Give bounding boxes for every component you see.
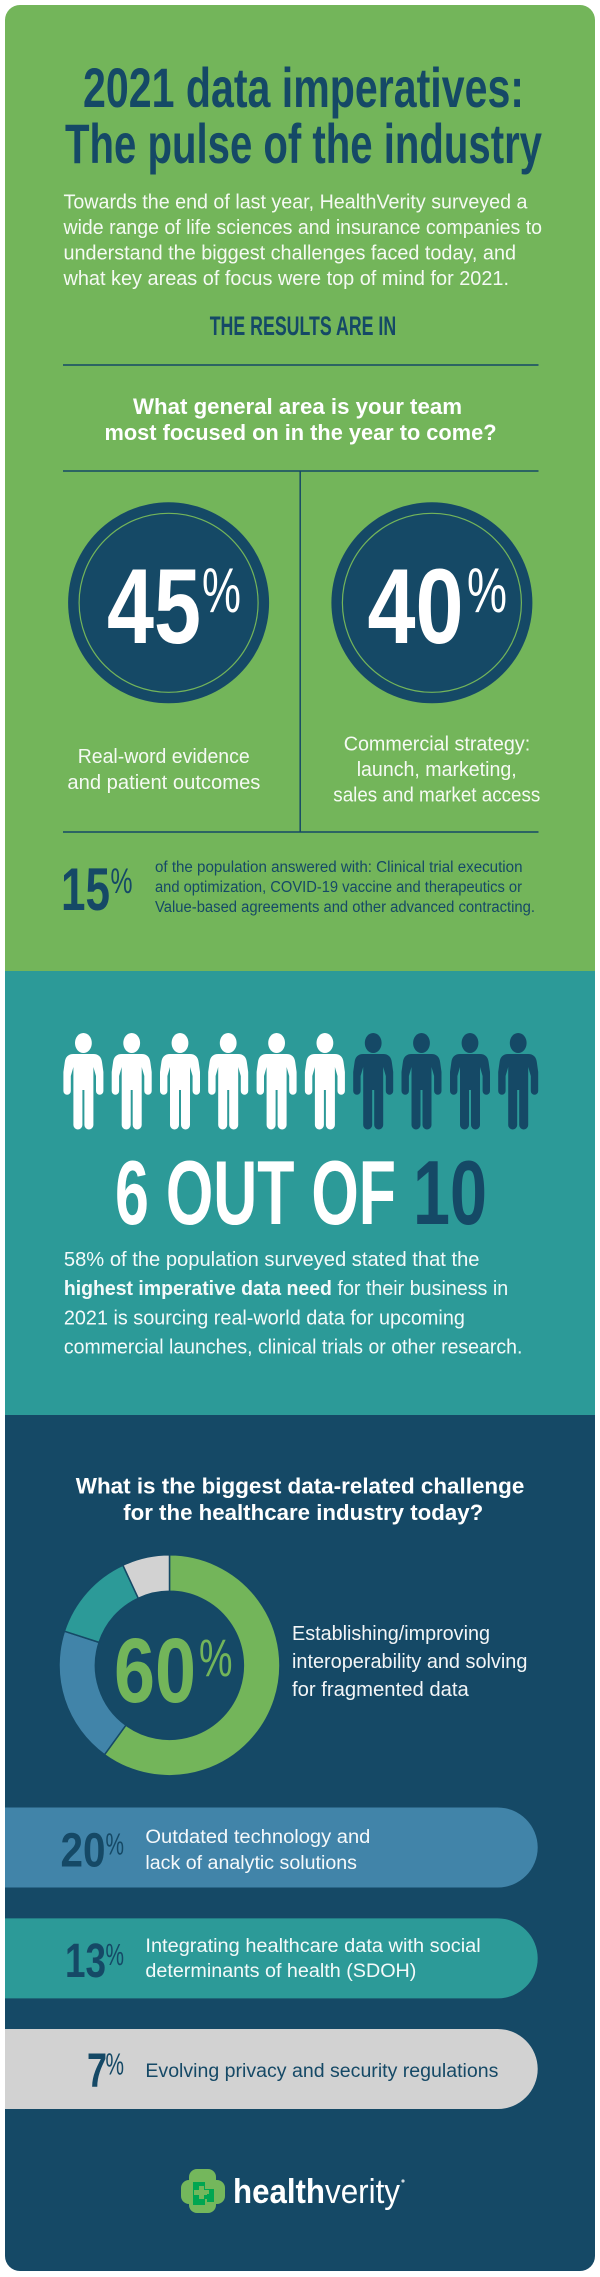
stat: 20%: % [106, 1826, 124, 1861]
text: 58% of population: for their business in [338, 1277, 508, 1300]
bar: 20% outdated technology [5, 1808, 538, 1888]
text: integrating data: determinants of health (SDOH) [145, 1961, 416, 1982]
stat circle: 45%: 45 [107, 546, 201, 666]
label: real-word evidence: Real-word evidence [78, 746, 250, 768]
logo: healthverity [181, 2169, 405, 2213]
intro text: Towards the end of last year, HealthVerity surveyed a [64, 192, 528, 214]
heading: 6 out of 10 [117, 1160, 484, 1225]
stat circle: 40% [331, 502, 532, 703]
question: biggest challenge: for the healthcare industry today? [123, 1500, 483, 1525]
icon: cross [181, 2169, 225, 2213]
label: commercial strategy [333, 734, 540, 806]
label: real-word evidence: and patient outcomes [67, 772, 260, 794]
question: biggest challenge: What is the biggest data-related challenge [76, 1474, 524, 1498]
rule lines [63, 365, 538, 832]
stat: 13%: % [106, 1937, 124, 1972]
intro text: what key areas of focus were top of mind for 2021. [63, 268, 509, 290]
label: real-word evidence [67, 746, 260, 794]
icons: six white people [63, 1033, 345, 1130]
title [65, 56, 542, 175]
text: outdated technology [145, 1827, 370, 1874]
text: privacy and security: Evolving privacy and security regulations [145, 2061, 498, 2082]
text: 58% of population: highest imperative data need [64, 1277, 332, 1300]
panel: biggest challenge [5, 1415, 595, 2271]
stat: 15%: 15 [61, 856, 110, 923]
stat: 15%: % [110, 862, 132, 901]
heading: 6 out of 10: 6 OUT OF [115, 1143, 396, 1244]
panel: 6 out of 10 [5, 971, 595, 1416]
stat circle: 40%: % [467, 556, 507, 626]
segment: 13% teal [64, 1565, 138, 1642]
label: interoperability: Establishing/improving [292, 1623, 490, 1645]
stat: 13%: 13 [65, 1935, 106, 1988]
text: 58% of population: 2021 is sourcing real-world data for upcoming [64, 1306, 465, 1330]
text: outdated technology: lack of analytic solutions [145, 1853, 357, 1874]
text: remaining population: and optimization, COVID-19 vaccine and therapeutics or [155, 879, 522, 896]
stat: 60% [116, 1638, 232, 1703]
heading: 6 out of 10: 10 [413, 1143, 487, 1244]
stat circle: 45% [68, 502, 269, 703]
question: general area: What general area is your team [133, 394, 462, 419]
question: biggest challenge [76, 1474, 524, 1525]
wordmark: health [233, 2173, 325, 2211]
stat circle: 45%: % [202, 556, 241, 626]
label: interoperability [292, 1623, 527, 1701]
intro text: understand the biggest challenges faced today, and [64, 242, 516, 264]
wordmark: verity [325, 2173, 400, 2211]
text: 58% of population: 58% of the population surveyed stated that the [64, 1248, 480, 1271]
text: 58% of population [64, 1248, 522, 1358]
stat: 15% [64, 868, 132, 910]
text: integrating data: Integrating healthcare data with social [145, 1936, 481, 1957]
label: commercial strategy: sales and market access [333, 784, 540, 806]
stat: 60%: % [199, 1629, 232, 1688]
label: commercial strategy: Commercial strategy: [344, 734, 530, 756]
icons: four navy people [353, 1033, 538, 1130]
pictogram: ten people [63, 1033, 538, 1130]
bar: 13% integrating data [5, 1918, 538, 1998]
bar: 7% privacy and security [5, 2029, 538, 2109]
stat: 20% [62, 1832, 124, 1867]
intro text: wide range of life sciences and insurance companies to [63, 217, 542, 239]
question: general area: most focused on in the year to come? [104, 420, 496, 445]
panel: survey results [5, 5, 595, 971]
text: remaining population: of the population answered with: Clinical trial execution [155, 859, 522, 876]
intro text [63, 192, 542, 290]
stat: 7%: % [106, 2047, 124, 2082]
label: interoperability: for fragmented data [292, 1679, 470, 1701]
segment: 60% green [104, 1555, 280, 1776]
stat: 20%: 20 [60, 1825, 106, 1878]
text: remaining population: Value-based agreements and other advanced contracting. [155, 899, 535, 916]
stat: 7%: 7 [87, 2045, 107, 2098]
label: commercial strategy: launch, marketing, [357, 759, 517, 781]
text: 58% of population: commercial launches, clinical trials or other research. [64, 1336, 522, 1358]
stat circle: 40%: 40 [368, 546, 464, 666]
stat: 7% [88, 2053, 124, 2087]
text: integrating data [145, 1936, 481, 1982]
label: interoperability: interoperability and solving [292, 1651, 527, 1673]
question: general area [104, 394, 496, 445]
stat: 13% [67, 1943, 124, 1978]
donut chart [59, 1555, 280, 1776]
text: outdated technology: Outdated technology and [145, 1827, 370, 1848]
wordmark [235, 2178, 405, 2210]
subheading: the results are in: THE RESULTS ARE IN [210, 311, 396, 341]
text: remaining population [155, 859, 535, 916]
segment: 7% grey [123, 1555, 170, 1598]
segment: 20% blue [59, 1631, 126, 1755]
stat: 60%: 60 [114, 1620, 196, 1722]
